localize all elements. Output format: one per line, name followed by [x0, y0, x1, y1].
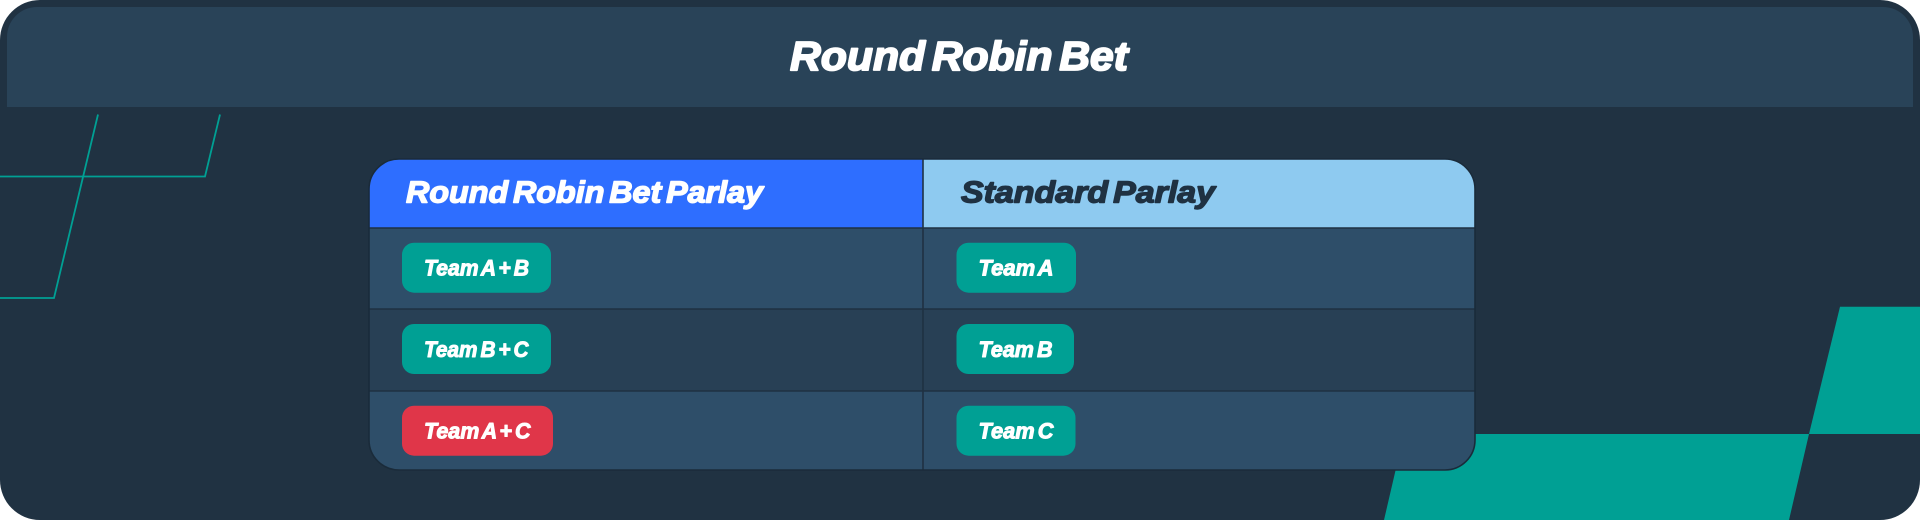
pill: team b	[956, 324, 1074, 374]
title: Round Robin Bet	[790, 33, 1130, 79]
column heading: standard parlay: Standard Parlay	[961, 174, 1217, 209]
decorative teal block: upper right	[1809, 307, 1920, 434]
table outline	[369, 159, 1475, 470]
decorative teal outline shapes	[0, 114, 220, 298]
pill: team a	[956, 243, 1076, 293]
pill: team a: Team A	[978, 256, 1054, 281]
pill: team a + b	[402, 243, 551, 293]
pill: team a + c (losing)	[402, 406, 553, 456]
title band	[7, 7, 1913, 107]
comparison table	[369, 159, 1475, 470]
pill: team b: Team B	[978, 337, 1053, 362]
pill: team a + b: Team A + B	[424, 256, 529, 281]
column heading: round robin bet parlay: Round Robin Bet Parlay	[406, 174, 765, 209]
header: round robin bet parlay	[369, 159, 923, 228]
pill: team c	[956, 406, 1076, 456]
pill: team b + c	[402, 324, 551, 374]
row 3	[369, 391, 1475, 470]
decorative teal block: bottom	[1384, 434, 1809, 520]
pill: team b + c: Team B + C	[424, 337, 530, 362]
row 2	[369, 309, 1475, 391]
pill: team c: Team C	[978, 418, 1055, 444]
table rows and headers	[369, 159, 1475, 470]
row 1	[369, 228, 1475, 309]
pill: team a + c (losing): Team A + C	[424, 418, 532, 444]
header: standard parlay	[923, 159, 1475, 228]
